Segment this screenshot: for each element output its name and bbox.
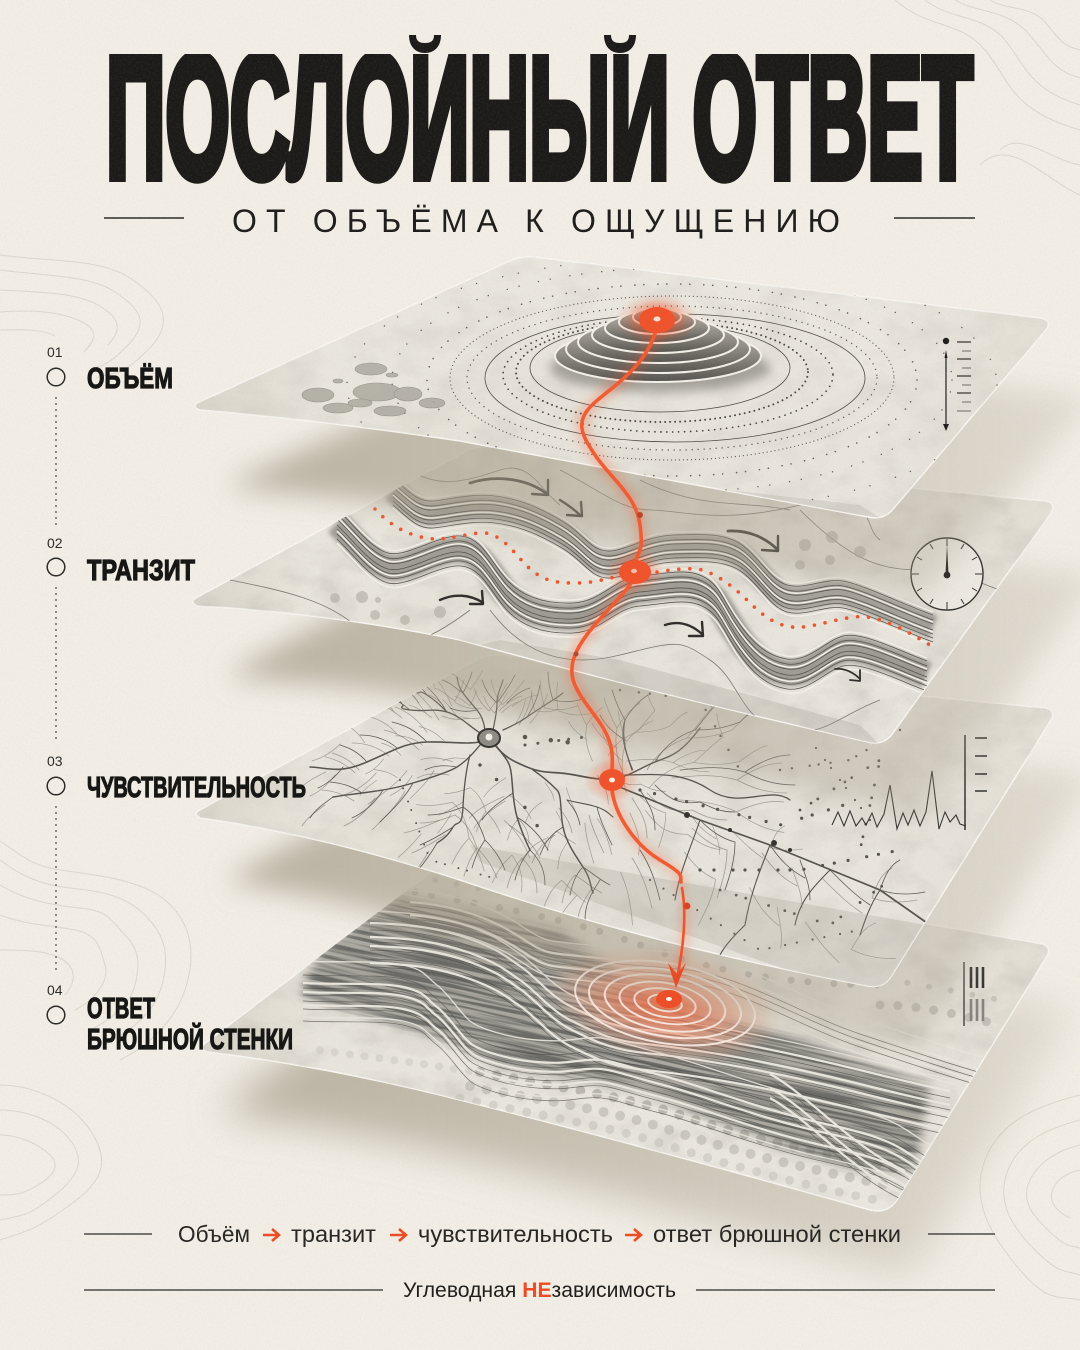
connector	[55, 397, 57, 525]
cell cluster	[302, 363, 445, 416]
lower wavy band	[337, 523, 927, 675]
step 01: ОБЪЁМ	[87, 362, 173, 395]
shadow under sheet 2	[233, 519, 1080, 815]
node: volume	[627, 299, 687, 341]
panel: sheet 2, transit	[190, 445, 1060, 745]
dark muscle mass	[295, 892, 936, 1178]
step 04: 04	[47, 982, 63, 998]
mound	[550, 294, 770, 392]
step 02	[47, 535, 195, 587]
lower sheet show-through band	[470, 845, 924, 986]
contour and stipple rings	[347, 258, 997, 512]
step 02: ТРАНЗИТ	[87, 555, 195, 587]
step 04: БРЮШНОЙ СТЕНКИ	[87, 1022, 293, 1056]
red signal path	[572, 330, 685, 978]
neuron extra twigs	[302, 680, 917, 928]
upper wavy band	[230, 468, 1000, 732]
summary chain: Объём	[178, 1221, 250, 1247]
summary chain: транзит	[291, 1221, 376, 1247]
cell rows	[320, 880, 1000, 1202]
step 01	[47, 344, 173, 395]
neuron inner twigs	[360, 690, 803, 869]
axon nodes	[684, 812, 792, 852]
shadow under sheet 3	[231, 720, 1080, 1052]
spike chart	[832, 735, 987, 830]
icon: stacked bars	[964, 962, 983, 1026]
glow and concentric rings	[539, 925, 791, 1081]
neuron main dendrites	[310, 677, 930, 955]
node: sensitivity	[584, 758, 640, 802]
panel: sheet 3, sensitivity	[196, 670, 1053, 988]
icon: vertical scale	[943, 338, 971, 431]
node: transit	[605, 550, 665, 594]
dotted transit line	[375, 509, 930, 645]
fibre bundles: grey lines	[303, 906, 985, 1208]
connector	[55, 587, 57, 743]
faint flow lines	[230, 468, 1000, 732]
neuron rotated twigs	[299, 670, 896, 964]
neural dots	[400, 690, 900, 950]
subtitle: ОТ ОБЪЁМА К ОЩУЩЕНИЮ	[232, 203, 840, 239]
step 01: 01	[47, 344, 63, 360]
neuron fine twigs	[310, 672, 925, 920]
step 03: 03	[47, 753, 63, 769]
shadow under sheet 4	[224, 907, 1071, 1273]
fibre bundles: pale strands	[303, 902, 985, 1195]
summary chain: чувствительность	[418, 1221, 613, 1247]
arrow to response	[668, 903, 690, 988]
shadow under sheet 1	[233, 335, 1080, 596]
panel: sheet 4, abdominal wall response	[202, 877, 1049, 1212]
summary chain	[84, 1221, 995, 1247]
panel: sheet 1, volume	[190, 255, 1060, 525]
timeline	[47, 344, 306, 1056]
connector	[55, 806, 57, 970]
step 03: ЧУВСТВИТЕЛЬНОСТЬ	[87, 772, 306, 804]
flow arrows	[440, 479, 860, 681]
step 04	[47, 982, 293, 1056]
transit node dots on the path	[574, 512, 643, 656]
step 02: 02	[47, 535, 63, 551]
faint cells	[330, 531, 866, 625]
soma	[478, 729, 500, 747]
step 04: ОТВЕТ	[87, 993, 155, 1025]
footer brand: Углеводная НЕзависимость	[403, 1279, 676, 1302]
summary chain: ответ брюшной стенки	[653, 1221, 901, 1247]
title	[109, 35, 974, 184]
step 03	[47, 753, 306, 804]
node: response	[656, 990, 682, 1008]
icon: clock	[911, 538, 983, 610]
